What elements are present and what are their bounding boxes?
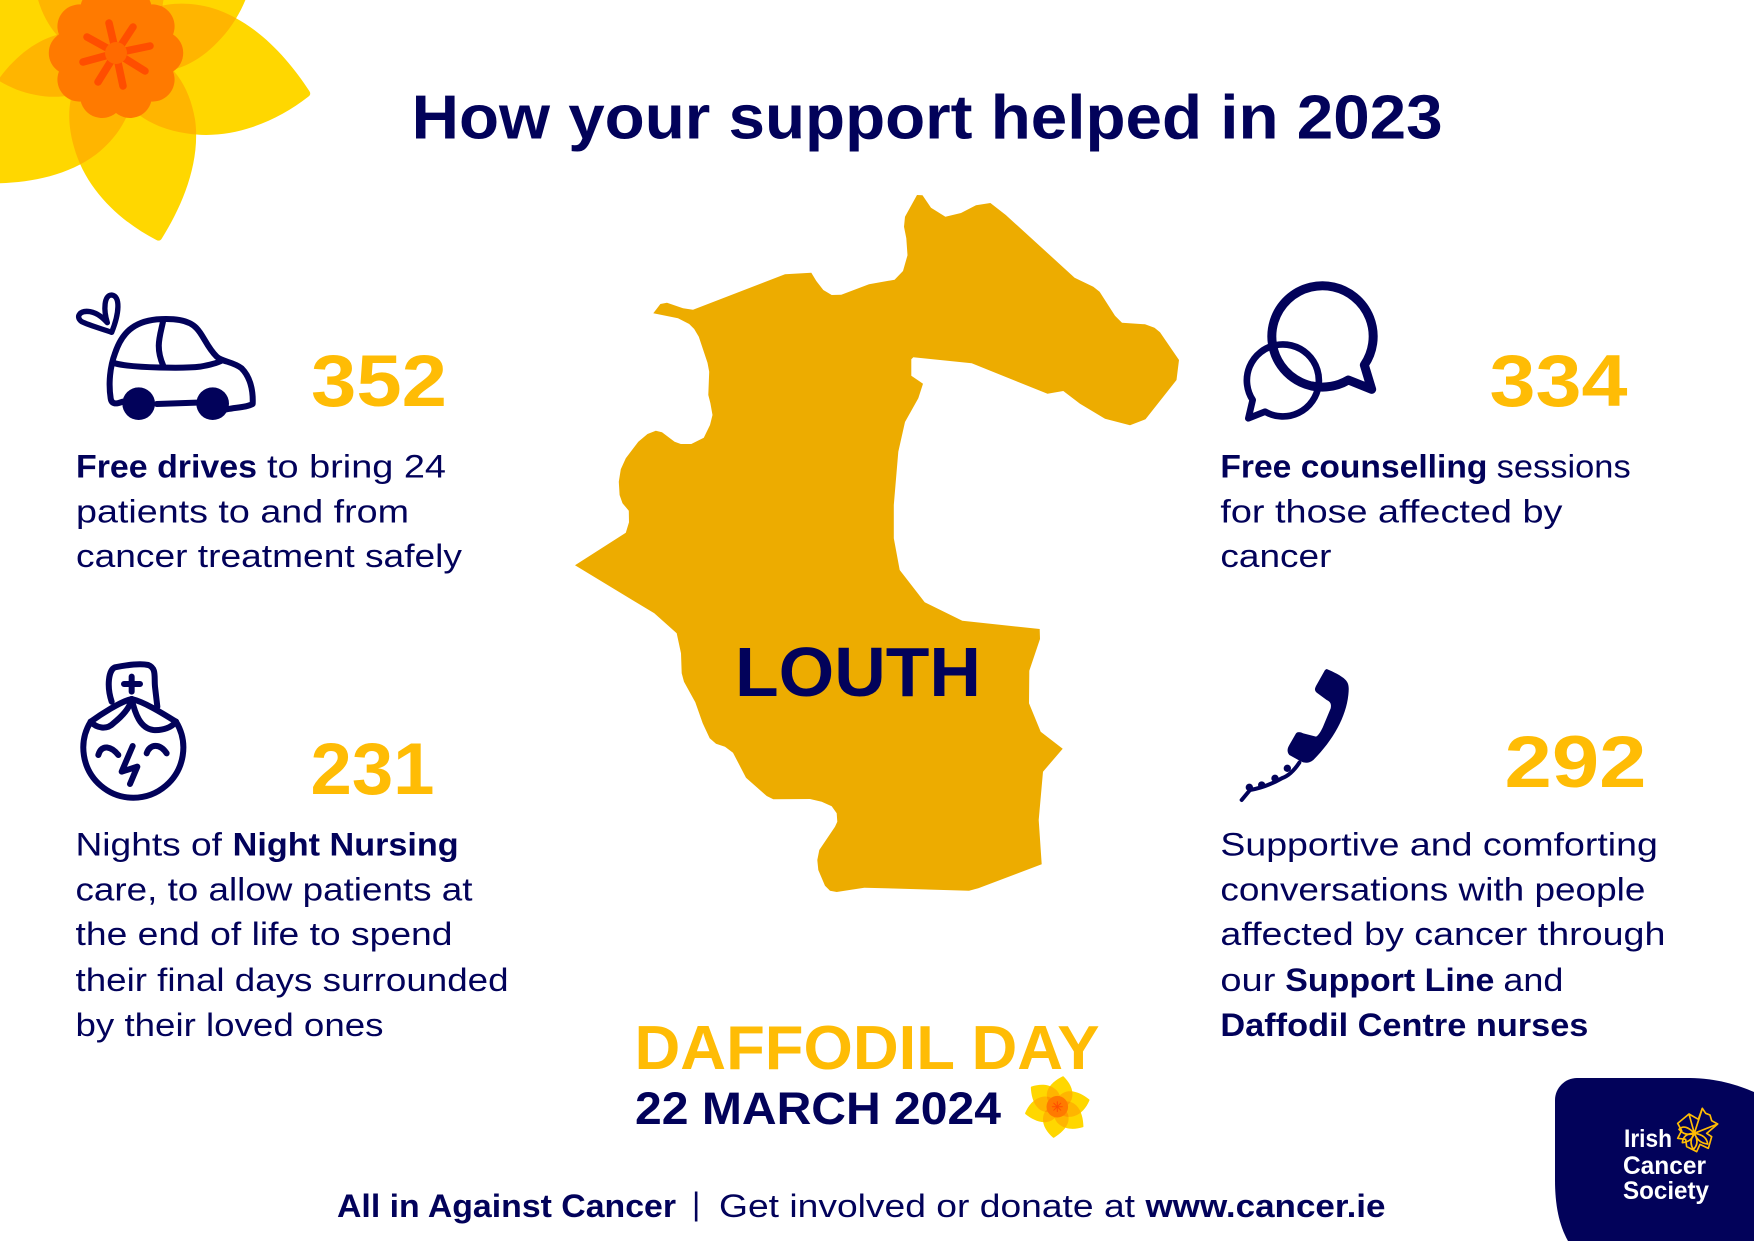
text: free drives description: to bring 24: [267, 449, 446, 485]
text: support line description: Supportive and comforting: [1220, 827, 1658, 863]
text: counselling description: for those affected by: [1220, 493, 1562, 529]
text: support line description: Daffodil Centre nurses: [1220, 1007, 1588, 1043]
panel: night nursing: [76, 664, 508, 1043]
footer line: [337, 1186, 1386, 1224]
text: free drives description: patients to and from: [76, 493, 409, 529]
icon: large daffodil: [0, 0, 324, 255]
text: free drives description: cancer treatment safely: [76, 538, 462, 574]
text: support line description: our: [1220, 962, 1276, 998]
number: 292: 292: [1504, 722, 1646, 803]
heading: Daffodil Day: DAFFODIL DAY: [634, 1014, 1100, 1083]
logo: Irish Cancer Society: Irish: [1624, 1125, 1672, 1153]
logo: Irish Cancer Society: Society: [1623, 1177, 1709, 1205]
text: night nursing description: by their loved ones: [76, 1007, 384, 1043]
text: night nursing description: [76, 827, 508, 1043]
text: support line description: [1220, 827, 1665, 1043]
text: support line description: and: [1503, 962, 1563, 998]
footer line: |: [692, 1186, 700, 1222]
logo: Irish Cancer Society: [1555, 1078, 1754, 1241]
number: 231: 231: [310, 729, 434, 810]
map: County Louth: [575, 195, 1179, 892]
footer line: www.cancer.ie: [1144, 1188, 1386, 1224]
text: support line description: affected by cancer through: [1220, 916, 1665, 952]
footer line: Get involved or donate at: [719, 1188, 1135, 1224]
number: 352: 352: [311, 341, 447, 422]
text: support line description: conversations with people: [1220, 872, 1645, 908]
text: night nursing description: care, to allow patients at: [76, 872, 473, 908]
icon: small daffodil: [1022, 1074, 1092, 1139]
map label: LOUTH: [735, 633, 981, 711]
text: night nursing description: Night Nursing: [233, 827, 459, 863]
icon: telephone handset: [1242, 669, 1349, 800]
number: 334: 334: [1490, 341, 1628, 422]
date: 22 MARCH 2024: [635, 1083, 1001, 1134]
text: support line description: Support Line: [1285, 962, 1494, 998]
text: free drives description: [76, 449, 462, 574]
text: free drives description: Free drives: [76, 449, 257, 485]
text: night nursing description: their final days surrounded: [76, 962, 508, 998]
text: counselling description: Free counselling: [1220, 449, 1487, 485]
panel: free drives: [76, 295, 462, 574]
text: counselling description: [1220, 449, 1631, 574]
text: counselling description: sessions: [1497, 449, 1631, 485]
footer line: All in Against Cancer: [337, 1188, 676, 1224]
icon: speech bubbles: [1247, 286, 1373, 418]
text: night nursing description: the end of life to spend: [76, 916, 452, 952]
text: counselling description: cancer: [1220, 538, 1332, 574]
title: How your support helped in 2023: [412, 84, 1443, 153]
logo: Irish Cancer Society: Cancer: [1623, 1152, 1706, 1180]
icon: car with heart: [79, 295, 253, 420]
icon: nurse face: [83, 664, 183, 798]
panel: support line: [1220, 669, 1665, 1043]
panel: free counselling: [1220, 286, 1631, 574]
text: night nursing description: Nights of: [76, 827, 222, 863]
